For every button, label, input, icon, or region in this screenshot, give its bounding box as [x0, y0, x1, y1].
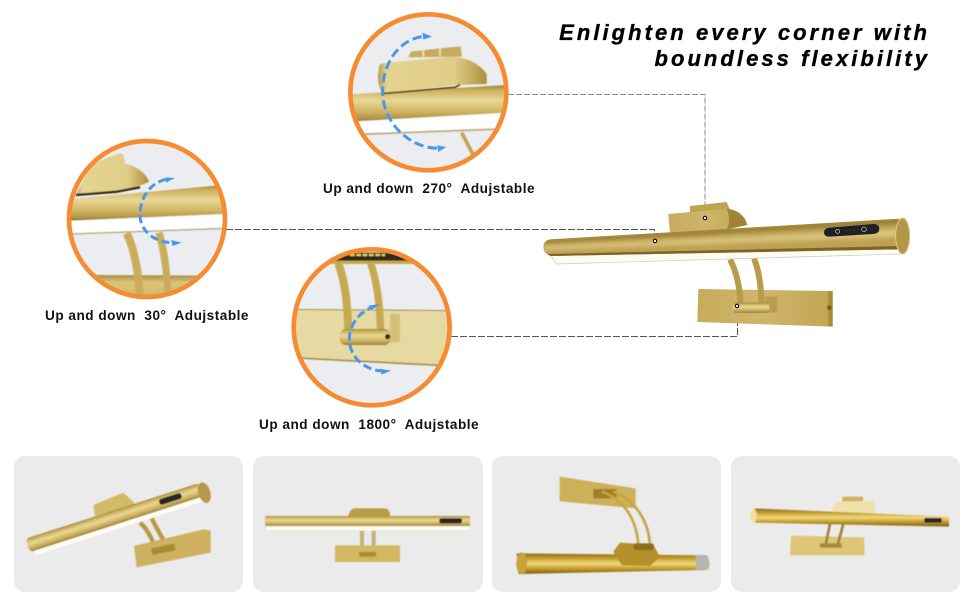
leader line: bottom detail	[451, 307, 738, 336]
detail circle: wall bracket pivot, 1800 degrees	[292, 249, 452, 405]
arrow: rotation 270 degrees	[383, 33, 446, 152]
light strip	[551, 249, 902, 264]
detail circle: top mount, 270 degrees	[350, 14, 507, 170]
wall bracket	[697, 289, 833, 327]
thumbnail panel 1	[14, 456, 243, 592]
leader line: left detail	[226, 230, 654, 239]
detail circle: tube, 30 degrees	[69, 141, 225, 300]
end cap	[896, 218, 910, 254]
thumbnail panel 2	[253, 456, 483, 592]
arrow: rotation 30 degrees	[140, 177, 182, 246]
title	[559, 20, 930, 71]
thumbnail panel 4	[731, 456, 960, 592]
thumbnail panel 3	[492, 456, 721, 592]
caption: 30 degrees: Up and down 30° Adujstable	[45, 308, 249, 323]
marker dots	[653, 216, 739, 308]
tube	[543, 218, 900, 256]
arms	[730, 258, 761, 305]
caption: 270 degrees: Up and down 270° Adujstable	[323, 181, 535, 196]
title: boundless flexibility	[654, 46, 930, 71]
title: Enlighten every corner with	[559, 20, 930, 45]
caption: 1800 degrees: Up and down 1800° Adujstable	[259, 417, 479, 432]
control panel	[824, 224, 879, 237]
top mount	[668, 202, 747, 233]
main product: picture light	[540, 202, 910, 327]
pivot	[733, 303, 769, 313]
arrow: rotation 1800 degrees	[349, 304, 391, 375]
leader line: top detail	[508, 94, 705, 217]
